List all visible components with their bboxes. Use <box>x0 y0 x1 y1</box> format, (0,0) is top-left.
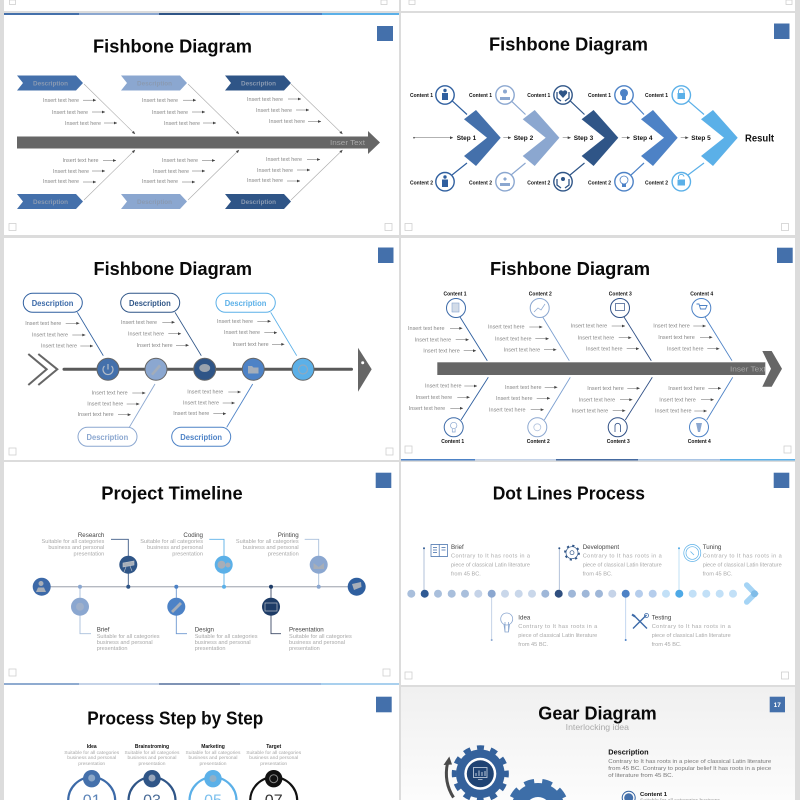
text: design <box>195 626 258 652</box>
page number square <box>774 24 790 39</box>
panel: chevron step fishbone <box>401 13 795 235</box>
step: idea: Idea <box>87 744 97 750</box>
text rows bottom: Insert text here <box>187 389 223 395</box>
text rows top: Insert text here <box>224 330 260 336</box>
text: coding <box>140 532 204 558</box>
timeline circles <box>33 556 366 616</box>
description text: Description <box>608 748 649 757</box>
text rows top: Insert text here <box>41 344 77 350</box>
content labels: Content 1 <box>441 439 464 445</box>
page number square <box>770 697 785 712</box>
text: testing: from 45 BC. <box>652 642 682 648</box>
vertical stems <box>423 547 680 641</box>
title: Dot Lines Process <box>493 482 645 503</box>
content labels: Content 2 <box>529 292 552 298</box>
step: target: business and personal <box>249 755 298 761</box>
text: brief <box>97 626 160 652</box>
content labels: Content 1 <box>645 93 668 99</box>
arrow head <box>358 348 372 392</box>
title: Gear Diagram <box>538 702 657 723</box>
text: tuning: piece of classical Latin literature <box>703 563 782 569</box>
description chevrons bottom: Description <box>33 199 68 206</box>
content labels: Content 2 <box>410 180 433 186</box>
text: tuning: from 45 BC. <box>703 572 733 578</box>
description pills top: Description <box>225 299 266 308</box>
text rows bottom: Insert text here <box>92 390 128 396</box>
text rows bottom: Insert text here <box>425 384 462 390</box>
text: brief: Suitable for all categories <box>97 634 160 640</box>
text: design: Design <box>195 626 215 634</box>
text rows bottom: Insert text here <box>53 169 89 175</box>
page number square <box>376 473 391 488</box>
text: brief: Contrary to It has roots in a <box>451 554 531 560</box>
text rows top: Insert text here <box>52 110 88 116</box>
elbow connectors <box>80 539 319 634</box>
rotation arrow <box>444 756 454 798</box>
text rows bottom: Insert text here <box>257 168 293 174</box>
text rows bottom <box>43 157 320 185</box>
icon rings top <box>436 86 690 104</box>
text rows bottom: Insert text here <box>579 397 615 403</box>
text: presentation: presentation <box>289 646 320 652</box>
text rows bottom: Insert text here <box>173 411 209 417</box>
spine line <box>64 368 352 371</box>
text rows top: Insert text here <box>495 336 532 342</box>
navigation buttons <box>9 448 393 455</box>
content labels: Content 2 <box>527 180 551 186</box>
icon: cog <box>565 546 579 560</box>
navigation buttons <box>405 446 791 453</box>
text rows top: Insert text here <box>233 342 269 348</box>
title: Project Timeline <box>101 482 243 503</box>
text: development: piece of classical Latin literature <box>583 563 662 569</box>
text: printing: presentation <box>268 552 299 558</box>
step: idea: presentation <box>78 761 105 767</box>
description chevrons top: Description <box>241 80 276 88</box>
text rows bottom: Insert text here <box>247 178 283 184</box>
step: target <box>246 744 302 800</box>
text rows top: Insert text here <box>423 348 460 354</box>
text rows bottom: Insert text here <box>587 386 624 392</box>
text: brief: Brief <box>97 626 110 634</box>
description chevrons top <box>17 76 291 90</box>
text: brief <box>451 544 531 578</box>
title: Process Step by Step <box>87 707 263 728</box>
text: tuning: Tuning <box>703 544 722 551</box>
text rows top: Insert text here <box>571 324 607 330</box>
text rows top: Insert text here <box>586 346 622 352</box>
page number square <box>774 473 789 488</box>
description chevrons top: Description <box>33 80 68 88</box>
step labels and arrows: Step 5 <box>691 135 711 142</box>
text rows top: Insert text here <box>658 335 695 341</box>
icon: book <box>431 544 448 556</box>
description text: of literature from 45 BC. <box>608 773 674 779</box>
text: printing: Printing <box>278 532 299 539</box>
step: marketing: business and personal <box>189 755 237 761</box>
chevron steps <box>464 110 738 166</box>
text: research: Research <box>78 532 105 539</box>
text rows top <box>43 97 321 127</box>
text rows top: Insert text here <box>408 326 444 332</box>
text rows bottom: Insert text here <box>489 407 526 413</box>
text rows top: Insert text here <box>137 343 173 349</box>
connector lines <box>77 312 297 427</box>
text rows bottom: Insert text here <box>655 409 692 415</box>
text rows bottom: Insert text here <box>266 157 302 163</box>
text rows bottom: Insert text here <box>659 397 696 403</box>
axis dots <box>78 585 321 589</box>
text rows bottom: Insert text here <box>153 169 189 175</box>
text: idea: Contrary to It has roots in a <box>518 624 598 630</box>
text rows top <box>408 324 719 354</box>
icon: bulb <box>501 613 513 632</box>
text: tuning: Contrary to It has roots in a <box>703 554 783 560</box>
text rows top: Insert text here <box>256 108 292 114</box>
step: marketing: Suitable for all categories <box>186 750 241 756</box>
dotted line <box>407 590 737 598</box>
text rows bottom: Insert text here <box>183 400 219 406</box>
content item: Content 1 <box>640 792 667 798</box>
title: Fishbone Diagram <box>94 258 252 279</box>
main arrow <box>437 351 782 387</box>
node icons <box>103 364 308 376</box>
step: idea <box>64 744 120 800</box>
text: coding: presentation <box>172 552 203 558</box>
text rows top: Insert text here <box>415 337 451 343</box>
title: Fishbone Diagram <box>93 36 252 56</box>
step labels and arrows <box>413 134 775 144</box>
step labels and arrows: Step 2 <box>514 135 533 142</box>
panel: gear diagram <box>401 687 795 800</box>
page number square: 17 <box>774 702 781 709</box>
text rows top: Insert text here <box>247 97 283 103</box>
step labels and arrows: Result <box>745 134 775 144</box>
tail double chevron <box>28 354 57 385</box>
text rows bottom: Insert text here <box>505 385 542 391</box>
step: target: presentation <box>260 761 287 767</box>
text: testing: Contrary to It has roots in a <box>652 624 732 630</box>
text rows bottom: Insert text here <box>668 386 705 392</box>
content icon circles bottom <box>444 418 708 437</box>
step: marketing: presentation <box>200 761 227 767</box>
step: brainstorming <box>125 744 180 800</box>
description text: Contrary to It has roots in a piece of classical Latin literature <box>608 759 771 765</box>
panel: process step by step <box>4 685 399 800</box>
description text <box>608 748 771 779</box>
step: idea: Suitable for all categories <box>64 750 120 756</box>
step: brainstorming: Suitable for all categories <box>125 750 180 756</box>
text: presentation <box>289 626 352 652</box>
text: testing: piece of classical Latin literature <box>652 633 731 639</box>
node circles <box>97 358 314 380</box>
description text: from 45 BC. Contrary to popular belief It has roots in a piece <box>608 766 771 772</box>
bones <box>84 84 342 200</box>
content labels: Content 2 <box>527 439 550 445</box>
text: development: from 45 BC. <box>583 572 613 578</box>
text rows bottom: Insert text here <box>572 408 608 414</box>
text rows bottom <box>409 384 721 415</box>
description pills top: Description <box>32 299 73 308</box>
text: development: Development <box>583 544 619 551</box>
text: idea: piece of classical Latin literature <box>518 633 597 639</box>
text rows top: Insert text here <box>164 121 200 127</box>
text rows top: Insert text here <box>142 98 178 104</box>
icons inside rings <box>442 89 685 188</box>
content labels: Content 4 <box>688 439 711 445</box>
text rows top: Insert text here <box>504 347 540 353</box>
text: development <box>583 544 663 578</box>
text: research: business and personal <box>48 545 104 551</box>
end chevron <box>747 585 758 602</box>
text rows top: Insert text here <box>217 319 253 325</box>
text rows bottom: Insert text here <box>162 158 198 164</box>
text: idea <box>518 614 598 648</box>
text rows bottom: Insert text here <box>409 406 445 412</box>
page number square <box>377 26 393 41</box>
text: printing <box>236 532 299 558</box>
navigation buttons <box>405 672 788 679</box>
text: testing: Testing <box>652 614 672 621</box>
text rows top <box>25 319 284 350</box>
navigation buttons <box>9 669 390 676</box>
text rows bottom <box>78 389 241 418</box>
text rows top: Insert text here <box>667 346 704 352</box>
text rows top: Insert text here <box>43 98 79 104</box>
content labels: Content 2 <box>588 180 611 186</box>
step: brainstorming: Brainstroming <box>135 744 169 750</box>
main arrow <box>17 131 380 154</box>
connector lines <box>452 101 704 175</box>
timeline icons <box>36 561 362 613</box>
text rows top: Insert text here <box>152 110 188 116</box>
icon rings bottom <box>436 172 690 191</box>
step: target: Suitable for all categories <box>246 750 302 756</box>
text: printing: business and personal <box>243 545 299 551</box>
text rows top: Insert text here <box>269 119 305 125</box>
text: coding: Coding <box>183 532 204 539</box>
panel: fishbone with content icons <box>401 238 795 460</box>
gear: large top <box>454 748 507 800</box>
text rows top: Insert text here <box>25 321 61 327</box>
text: brief: from 45 BC. <box>451 572 481 578</box>
text rows bottom: Insert text here <box>78 412 114 418</box>
title: Fishbone Diagram <box>489 34 648 54</box>
text: research: Suitable for all categories <box>41 539 105 545</box>
text: research <box>41 532 105 558</box>
gear: lower right <box>509 781 567 800</box>
text: design: business and personal <box>195 640 251 646</box>
navigation buttons <box>9 224 392 230</box>
navigation buttons <box>405 224 788 230</box>
content labels: Content 4 <box>690 292 713 298</box>
text rows top: Insert text here <box>65 121 101 127</box>
description chevrons bottom: Description <box>241 199 276 206</box>
description chevrons bottom: Description <box>137 199 172 206</box>
text rows top: Insert text here <box>488 325 524 331</box>
title: Fishbone Diagram <box>490 258 650 279</box>
text: coding: Suitable for all categories <box>140 539 203 545</box>
panel: fishbone timeline with circles <box>4 238 399 460</box>
subtitle: Interlocking idea <box>566 723 630 732</box>
text: printing: Suitable for all categories <box>236 539 299 545</box>
panel: project timeline <box>4 462 399 685</box>
text: brief: piece of classical Latin literature <box>451 563 530 569</box>
main arrow: Inser Text <box>730 364 767 374</box>
text: brief: Brief <box>451 544 464 551</box>
text rows top: Insert text here <box>653 324 690 330</box>
text rows top: Insert text here <box>121 320 157 326</box>
step: marketing <box>186 744 241 800</box>
content labels: Content 3 <box>609 292 632 298</box>
content labels <box>410 93 668 186</box>
text: idea: Idea <box>518 614 531 621</box>
step: marketing: Marketing <box>201 744 225 750</box>
content labels <box>441 292 713 445</box>
text rows bottom: Insert text here <box>62 158 98 164</box>
description pills bottom <box>78 427 231 446</box>
page number square <box>378 248 394 263</box>
text: design: presentation <box>195 646 225 652</box>
step: target: Target <box>266 744 281 750</box>
step labels and arrows: Step 4 <box>633 135 653 142</box>
icon: monitor chart <box>474 768 487 780</box>
text: presentation: Presentation <box>289 626 324 634</box>
content labels: Content 1 <box>410 93 433 99</box>
content labels: Content 1 <box>469 93 492 99</box>
description pills top: Description <box>129 299 171 308</box>
page number square <box>777 248 793 263</box>
panel: fishbone diagram with chevrons <box>4 13 399 235</box>
step labels and arrows: Step 1 <box>457 135 476 142</box>
description chevrons bottom <box>17 194 291 209</box>
step labels and arrows: Step 3 <box>574 135 593 142</box>
content labels: Content 3 <box>607 439 630 445</box>
description pills bottom: Description <box>180 433 222 442</box>
text rows top: Insert text here <box>578 335 614 341</box>
text rows bottom: Insert text here <box>142 179 178 185</box>
panel: cropped slide top left <box>4 0 399 11</box>
icon: tools <box>632 614 648 628</box>
bones <box>460 317 733 420</box>
text: idea: from 45 BC. <box>518 642 549 648</box>
content item <box>622 791 721 800</box>
text: presentation: business and personal <box>289 640 345 646</box>
text rows bottom: Insert text here <box>416 395 452 401</box>
content icon circles top <box>446 298 711 318</box>
content labels: Content 1 <box>527 93 551 99</box>
description pills bottom: Description <box>86 433 128 442</box>
step: brainstorming: presentation <box>139 761 166 767</box>
text: research: presentation <box>74 552 104 558</box>
text: design: Suitable for all categories <box>195 634 258 640</box>
text: testing <box>652 614 732 648</box>
text rows bottom: Insert text here <box>496 396 532 402</box>
text: brief: presentation <box>97 646 127 652</box>
text rows bottom: Insert text here <box>87 402 123 408</box>
text rows top: Insert text here <box>32 333 68 339</box>
text: tuning <box>703 544 783 578</box>
main arrow: Inser Text <box>330 138 366 147</box>
description chevrons top: Description <box>137 80 172 88</box>
icon: gauge <box>684 544 701 562</box>
text rows bottom: Insert text here <box>43 179 79 185</box>
content labels: Content 1 <box>588 93 611 99</box>
panel: dot lines process <box>401 462 795 685</box>
text: brief: business and personal <box>97 640 153 646</box>
text: coding: business and personal <box>147 545 203 551</box>
content labels: Content 1 <box>444 292 467 298</box>
text rows top: Insert text here <box>128 331 164 337</box>
timeline axis <box>42 586 357 588</box>
content labels: Content 2 <box>469 180 492 186</box>
page number square <box>376 697 392 712</box>
step: idea: business and personal <box>67 755 116 761</box>
text: presentation: Suitable for all categories <box>289 634 352 640</box>
panel: cropped slide top right <box>401 0 795 11</box>
text: development: Contrary to It has roots in a <box>583 554 663 560</box>
content labels: Content 2 <box>645 180 668 186</box>
step: brainstorming: business and personal <box>128 755 176 761</box>
description pills top <box>23 293 275 312</box>
